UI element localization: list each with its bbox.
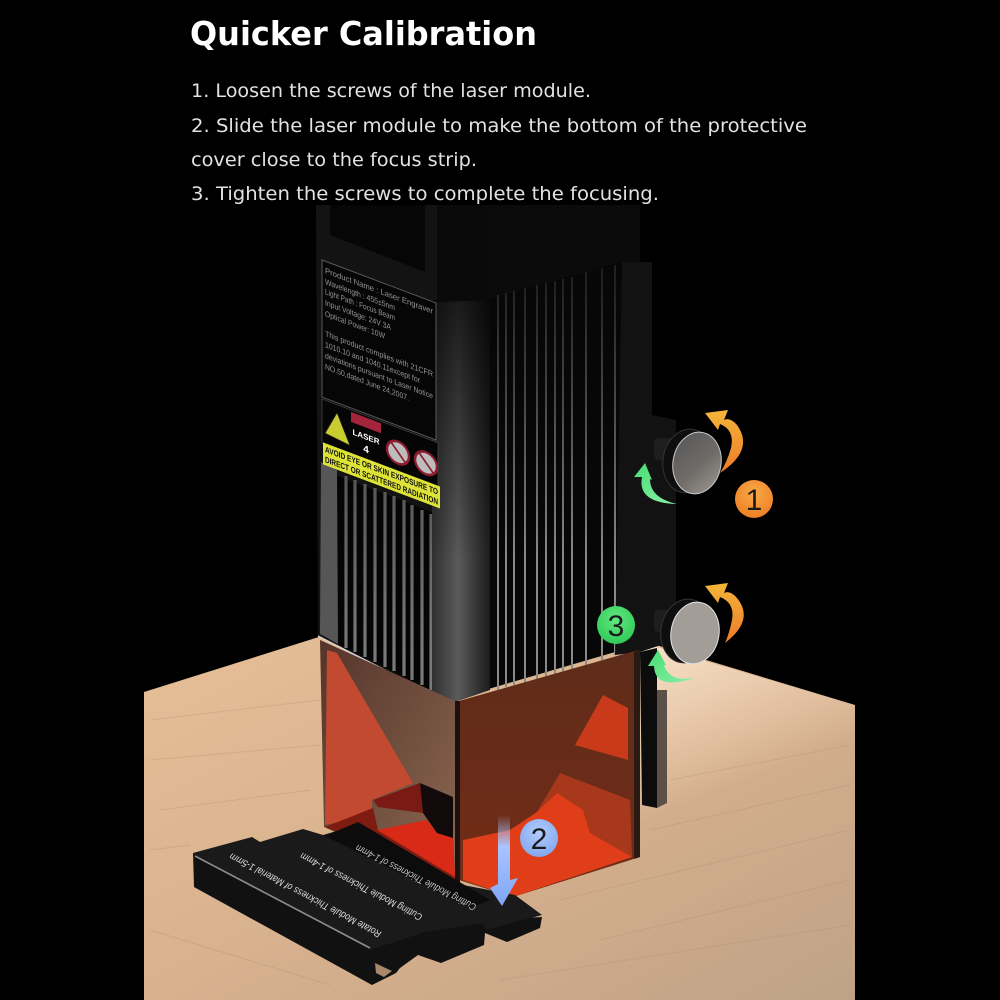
right cover edge [634,650,640,859]
label spec text: Optical Power: 10W [325,309,385,341]
focus strip [193,822,542,985]
laser module [316,205,640,705]
strip edge highlight [195,856,370,948]
strip label one: Rotate Module Thickness of Material 1-5mm [228,850,383,939]
mounting bracket [615,262,676,808]
corner column [432,300,490,702]
left face lower band [322,470,440,695]
cover right face [459,650,640,897]
module upper section [437,205,640,302]
instructions: 1. Loosen the screws of the laser module. [191,80,591,102]
instructions: 2. Slide the laser module to make the bottom of the protective [191,115,807,137]
left edge highlight [320,462,338,644]
lower knob [654,595,724,668]
red light cone [325,650,413,825]
corner column top fade [432,300,490,560]
title: Quicker Calibration [190,14,537,53]
arrow: lower green rotation [648,650,697,682]
icon: prohibition sign two [415,448,437,478]
label spec text: deviations pursuant to Laser Notice [325,351,433,401]
interior black block [420,783,453,838]
laser class number: 4 [363,444,369,457]
label spec text: Product Name : Laser Engraver [325,266,433,316]
badge: step 3 [597,606,635,644]
red reflection panel [575,695,628,760]
arrow: blue downward [490,815,518,906]
label spec text: Wavelength : 455±5nm [325,277,395,312]
icon: prohibition sign one [387,438,409,468]
strip front face [193,853,542,985]
icon: laser hazard triangle [325,408,350,446]
upper knob [654,425,726,498]
product label [322,260,440,508]
instructions: 3. Tighten the screws to complete the focusing. [191,183,659,205]
interior left floor [325,808,455,880]
strip label three: Cutting Module Thickness of 1-4mm [354,841,478,912]
yellow warning strip: DIRECT OR SCATTERED RADIATION [325,454,438,507]
cover slot shadow [325,822,490,908]
module left face [316,205,455,705]
slider rail [640,648,657,808]
arrow: lower orange rotation [705,583,744,643]
badge: step 2 [520,819,558,857]
badge: step 3: 3 [608,610,624,643]
bright left floor [377,820,455,877]
slider rail edge [657,690,667,808]
danger tag [351,412,381,433]
dark vertical edge [455,701,460,887]
warning row [322,399,438,487]
right cooling fins [498,265,615,690]
strip hook notch [375,963,392,977]
badge: step 1: 1 [746,484,762,517]
instructions [191,80,807,205]
strip top face [193,829,542,950]
table surface [144,636,855,1000]
badge: step 2: 2 [531,823,547,856]
label spec text: 1010.10 and 1040.11except for [325,340,420,385]
label spec text: Light Path : Focus Beam [325,287,395,322]
mid red wall [537,773,632,857]
arrow: upper green rotation [634,463,677,504]
bottom rim line [318,636,432,694]
interior red block [373,783,423,813]
upper window recess [330,205,425,272]
label spec text: This product complies with 21CFR [325,329,433,379]
label spec text: NO.50,dated June 24,2007. [325,362,409,403]
yellow warning strip: AVOID EYE OR SKIN EXPOSURE TO [325,444,438,497]
label spec text: Input Voltage: 24V 3A [325,298,391,332]
instructions: cover close to the focus strip. [191,149,477,171]
laser class: LASER [352,428,380,447]
label spec text [325,266,433,412]
arrow: upper orange rotation [705,410,743,473]
strip label two: Cutting Module Thickness of 1-4mm [299,850,424,922]
protective cover [320,640,640,897]
corner column upper [437,205,490,302]
cover left face [320,640,457,887]
module right face [485,262,622,690]
badge: step 1 [735,480,773,518]
red glow floor [463,793,632,897]
left cooling fins [346,476,431,690]
